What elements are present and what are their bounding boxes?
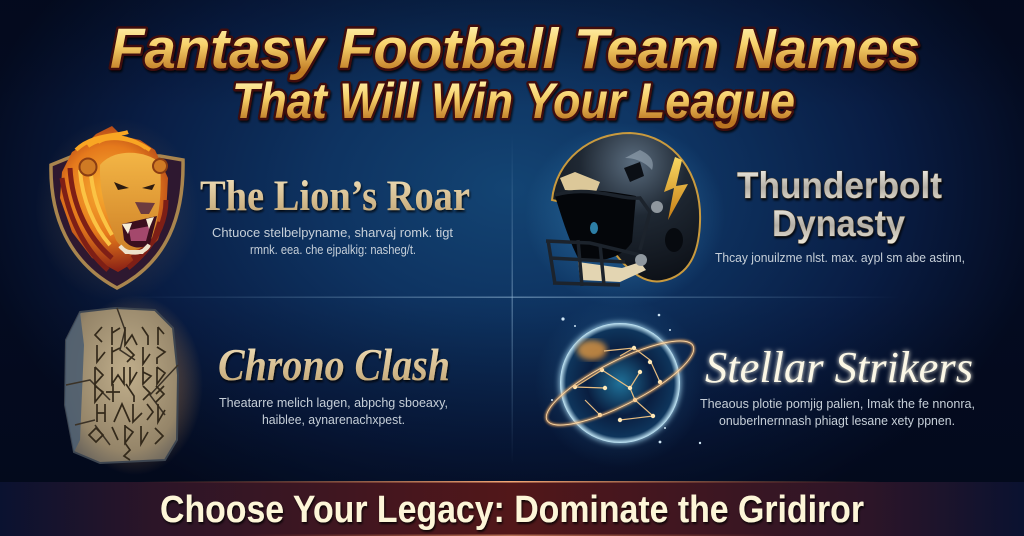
- panel: The Lion's Roar: [35, 118, 470, 302]
- icon: lion shield: [35, 118, 199, 302]
- heading: The Lion's Roar: The Lion’s Roar: [200, 173, 470, 220]
- description: onuberlnernnash phiagt lesane xety ppnen.: [719, 414, 955, 428]
- description: [219, 396, 448, 427]
- description: [700, 397, 975, 428]
- title: Fantasy Football Team Names: [110, 17, 920, 81]
- heading: Chrono Clash: Chrono Clash: [218, 340, 450, 390]
- heading: Thunderbolt Dynasty: Thunderbolt: [737, 165, 942, 206]
- heading: Stellar Strikers: Stellar Strikers: [705, 343, 973, 392]
- icon: rune tablet: [65, 295, 203, 475]
- icon: constellation globe: [535, 298, 705, 468]
- panel dividers: [130, 135, 900, 465]
- description: Theaous plotie pomjig palien, Imak the fe nnonra,: [700, 397, 975, 411]
- title: That Will Win Your League: [232, 73, 795, 129]
- description: rmnk. eea. che ejpalkig: nasheg/t.: [250, 243, 416, 257]
- description: [212, 226, 454, 257]
- icon: football helmet: [525, 123, 725, 307]
- footer tagline: Choose Your Legacy: Dominate the Gridiror: [160, 489, 864, 531]
- panel: Chrono Clash: [65, 295, 450, 475]
- title: [110, 17, 920, 129]
- footer banner: [0, 481, 1024, 536]
- panel: Stellar Strikers: [535, 298, 975, 468]
- description: Chtuoce stelbelpyname, sharvaj romk. tigt: [212, 226, 454, 240]
- description: haiblee, aynarenachxpest.: [262, 413, 405, 427]
- panel: Thunderbolt Dynasty: [525, 123, 965, 307]
- description: Thcay jonuilzme nlst. max. aypl sm abe astinn,: [715, 251, 965, 265]
- description: Theatarre melich lagen, abpchg sboeaxy,: [219, 396, 448, 410]
- heading: Thunderbolt Dynasty: Dynasty: [772, 203, 905, 244]
- heading: Thunderbolt Dynasty: [737, 165, 942, 244]
